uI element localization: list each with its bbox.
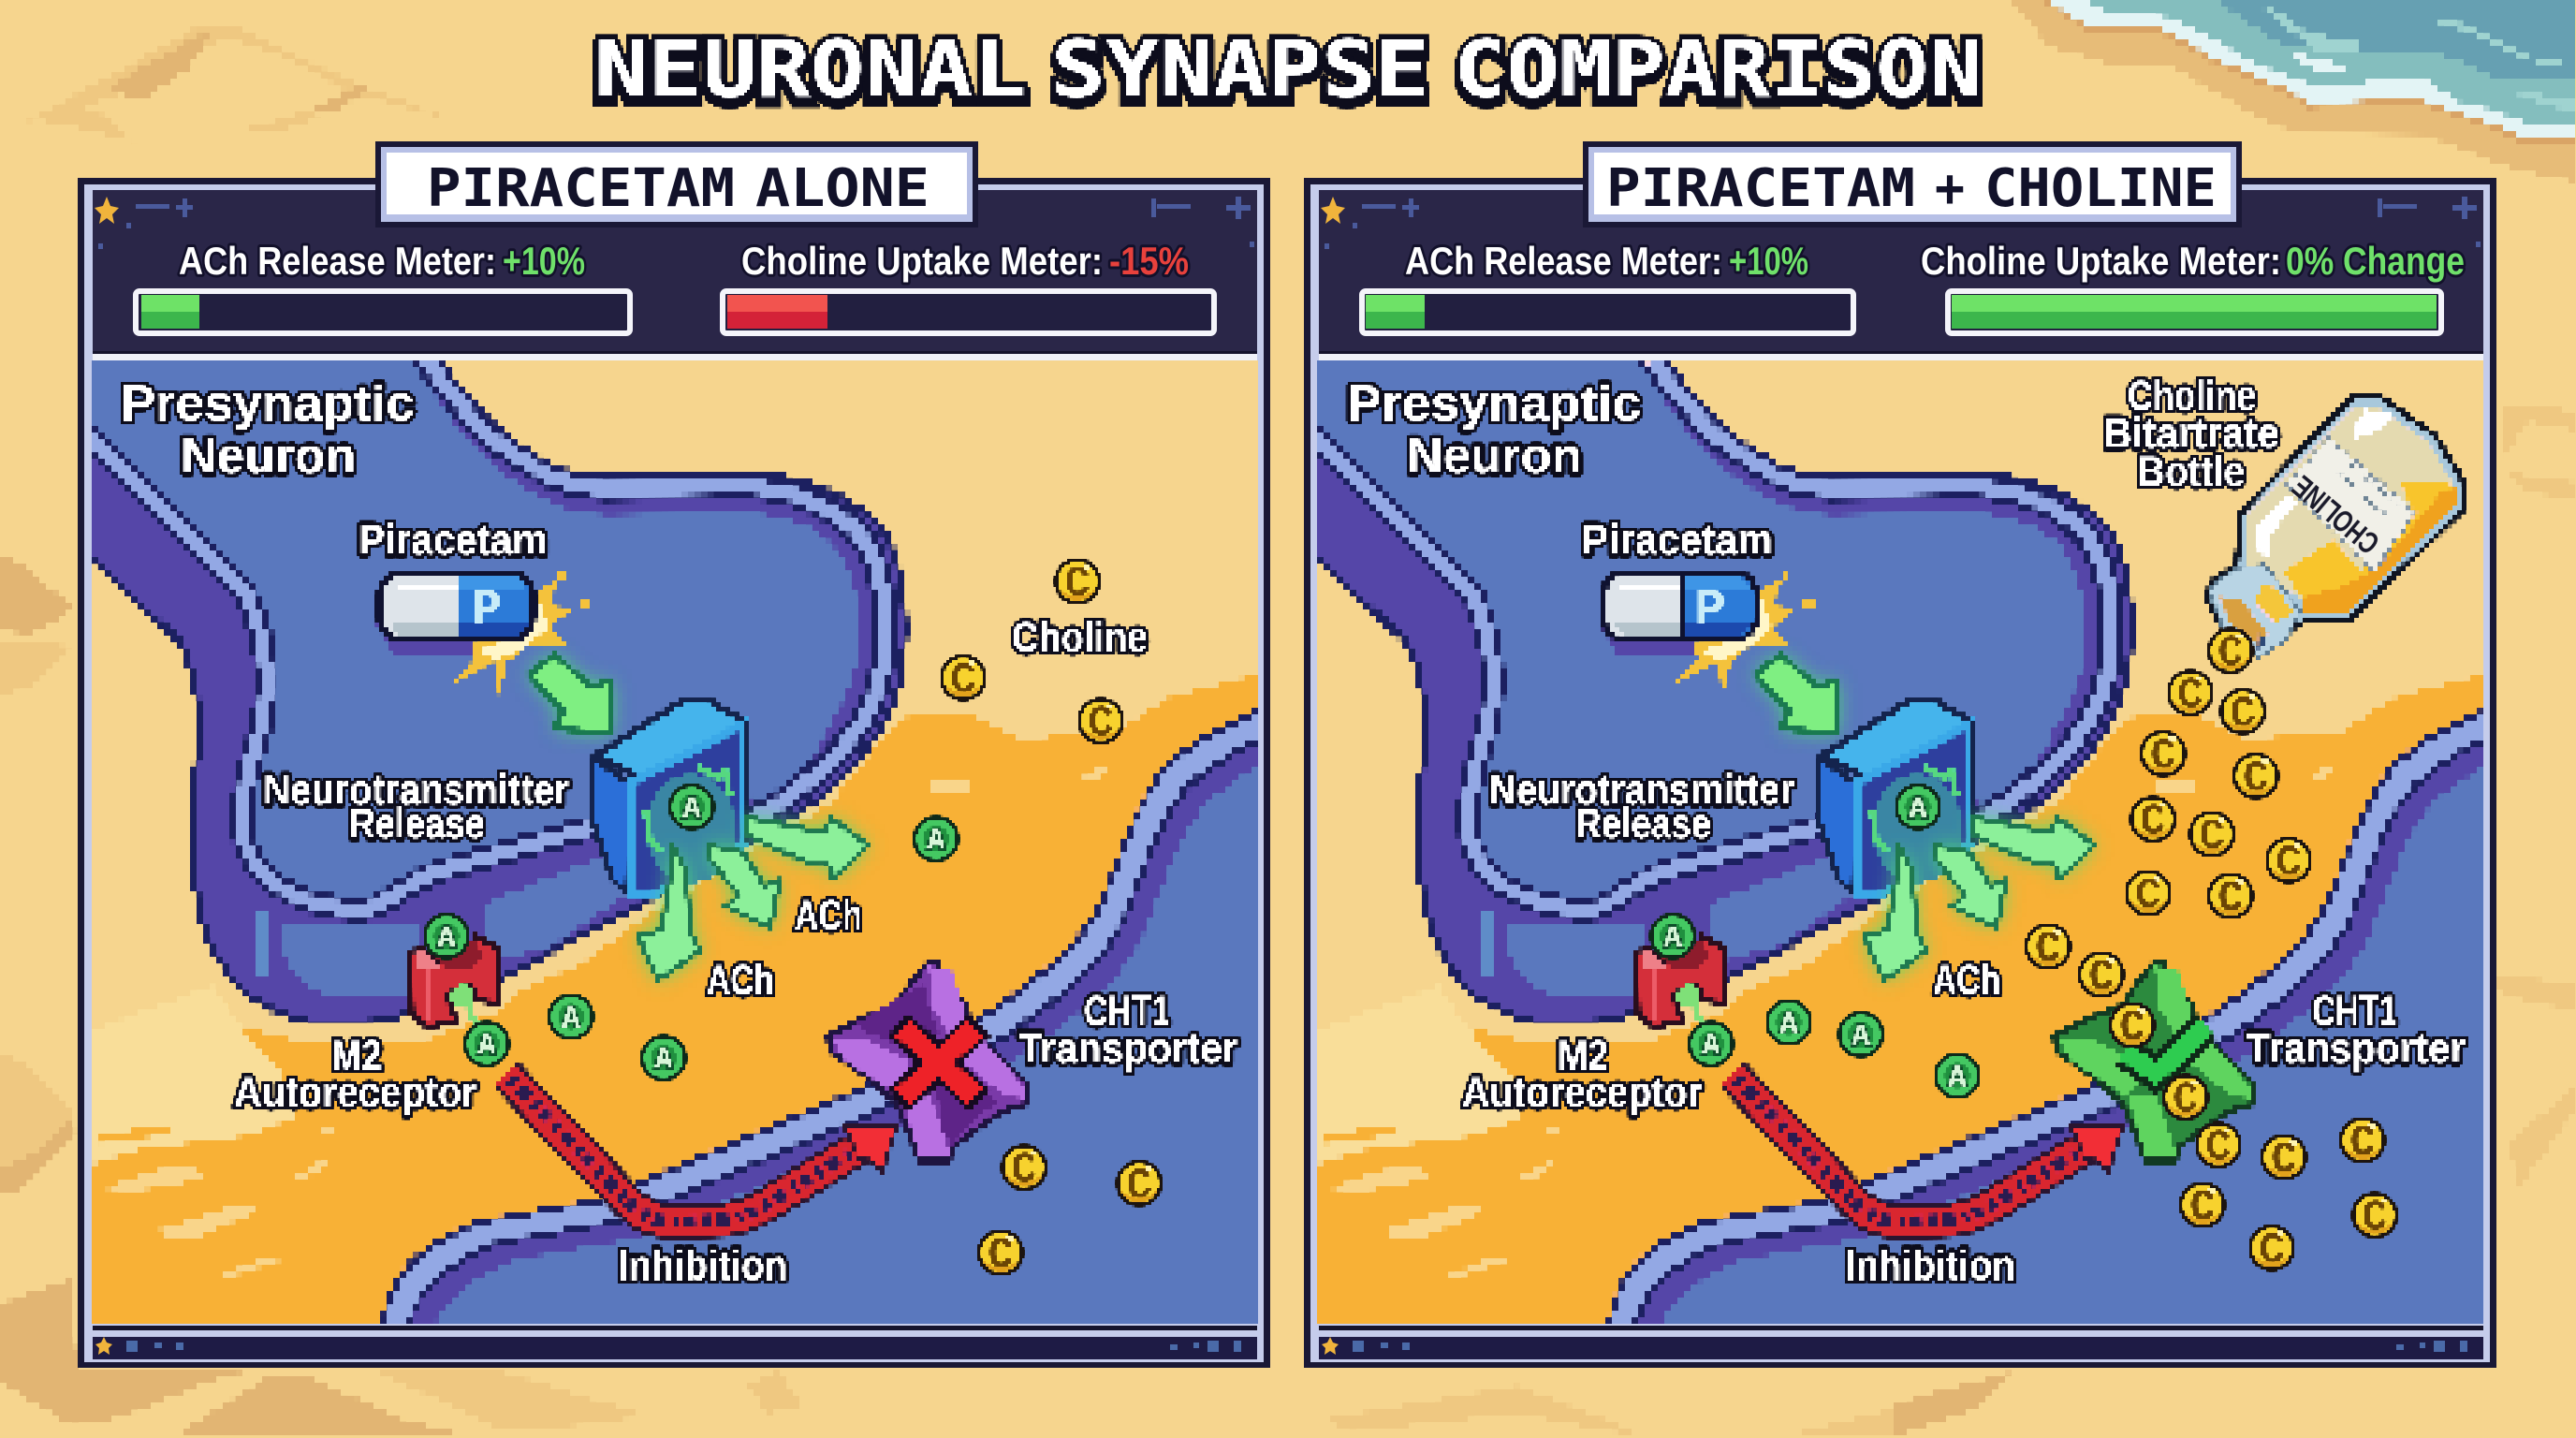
choline molecules: C bbox=[2276, 839, 2302, 888]
ACh molecules: A bbox=[1702, 1029, 1720, 1064]
labels: Choline bbox=[2128, 372, 2256, 419]
choline molecules bbox=[2025, 627, 2398, 1275]
ACh molecules: A bbox=[1779, 1007, 1798, 1042]
choline molecules: C bbox=[2349, 1119, 2376, 1167]
ACh molecules: A bbox=[1852, 1020, 1870, 1054]
choline molecules: C bbox=[2088, 953, 2115, 1002]
labels: Release bbox=[1575, 800, 1711, 847]
meter: ACh release: ACh Release Meter: bbox=[1405, 239, 1722, 283]
CHOLINE bottle text: CHOLINE bbox=[2286, 469, 2386, 561]
inhibition arrow bbox=[1733, 1075, 2123, 1222]
labels: Release bbox=[349, 800, 485, 847]
labels: Choline bbox=[1012, 613, 1148, 661]
choline molecules: C bbox=[1126, 1162, 1152, 1211]
labels: CHT1 bbox=[1084, 987, 1170, 1034]
choline molecules: C bbox=[2140, 798, 2166, 846]
choline molecules: C bbox=[2271, 1136, 2297, 1184]
choline molecules: C bbox=[2217, 629, 2244, 678]
choline molecules: C bbox=[2189, 1183, 2216, 1232]
arrow: piracetam to release site bbox=[1755, 655, 1837, 733]
choline molecules: C bbox=[2230, 690, 2256, 739]
P letter on capsule: P bbox=[471, 580, 503, 640]
postsynaptic neuron bbox=[1601, 707, 2576, 1438]
meter: choline uptake: Choline Uptake Meter: bbox=[741, 239, 1103, 283]
ACh molecules: A bbox=[927, 824, 945, 858]
P letter on capsule: P bbox=[1694, 580, 1726, 640]
tab: piracetam + choline bbox=[1583, 141, 2242, 227]
title: COMPARISON bbox=[1454, 23, 1982, 115]
synaptic cleft fluid bbox=[1310, 672, 2490, 1334]
choline molecules: C bbox=[2199, 813, 2225, 861]
panel: piracetam alone bbox=[78, 141, 1445, 1438]
meter: ACh release: ACh Release Meter: bbox=[179, 239, 496, 283]
labels: M2 bbox=[1558, 1032, 1608, 1079]
labels: Piracetam bbox=[359, 516, 548, 564]
CHT1 transporter blocked bbox=[828, 962, 1027, 1161]
choline molecules: C bbox=[2135, 872, 2161, 920]
arrows: ACh release bbox=[1865, 817, 2094, 980]
choline molecules: C bbox=[2035, 925, 2061, 974]
panel frame bbox=[1304, 178, 2496, 1368]
M2 autoreceptor bbox=[1636, 936, 1724, 1030]
labels: ACh bbox=[795, 891, 862, 939]
choline molecules: C bbox=[2177, 671, 2203, 720]
labels: Presynaptic bbox=[1347, 375, 1641, 432]
labels: Neurotransmitter bbox=[1489, 766, 1794, 814]
starburst bbox=[452, 573, 592, 696]
arrows: ACh release bbox=[638, 817, 868, 980]
choline molecules bbox=[940, 558, 1163, 1280]
meter: ACh release bbox=[1362, 239, 1853, 333]
panel: piracetam + choline bbox=[1304, 141, 2576, 1438]
release vesicle box bbox=[1820, 700, 1977, 896]
choline molecules: C bbox=[2205, 1123, 2232, 1172]
synapse objects bbox=[376, 569, 1027, 1222]
CHT1 transporter active bbox=[2055, 962, 2253, 1161]
meter: choline uptake: 0% Change bbox=[2286, 239, 2465, 283]
meter: choline uptake bbox=[723, 239, 1214, 333]
choline bitartrate bottle bbox=[2203, 393, 2468, 657]
labels bbox=[1347, 372, 2466, 1289]
ACh molecules bbox=[1649, 784, 1981, 1099]
tab: piracetam alone bbox=[375, 141, 978, 227]
tab: piracetam + choline: PIRACETAM bbox=[1606, 158, 1915, 219]
ACh molecules: A bbox=[562, 1002, 580, 1036]
tab: piracetam + choline: + bbox=[1935, 158, 1965, 219]
choline molecules: C bbox=[2243, 755, 2269, 803]
meter: choline uptake: Choline Uptake Meter: bbox=[1921, 239, 2281, 283]
labels: CHT1 bbox=[2312, 987, 2397, 1034]
ACh molecules bbox=[423, 784, 959, 1081]
panel frame bbox=[78, 178, 1270, 1368]
labels: Inhibition bbox=[618, 1241, 787, 1289]
choline molecules: C bbox=[1011, 1146, 1037, 1195]
choline molecules: C bbox=[988, 1231, 1014, 1280]
labels: Autoreceptor bbox=[234, 1068, 476, 1116]
synapse background: fluid and neurons bbox=[92, 360, 1258, 1324]
postsynaptic neuron bbox=[380, 708, 1258, 1324]
choline molecules: C bbox=[2362, 1194, 2388, 1242]
release vesicle box bbox=[593, 700, 751, 896]
title: NEURONAL bbox=[594, 23, 1027, 115]
ACh molecules: A bbox=[1909, 792, 1927, 827]
synaptic cleft fluid bbox=[84, 672, 1264, 1334]
choline molecules: C bbox=[2150, 732, 2176, 781]
tab: piracetam + choline: CHOLINE bbox=[1984, 158, 2217, 219]
labels: Neuron bbox=[1407, 428, 1582, 484]
labels: Neurotransmitter bbox=[263, 766, 569, 814]
synapse objects bbox=[1600, 393, 2468, 1222]
tab: piracetam alone: ALONE bbox=[755, 158, 929, 219]
choline molecules: C bbox=[1064, 560, 1090, 609]
labels: Bottle bbox=[2138, 448, 2245, 495]
labels: Autoreceptor bbox=[1462, 1068, 1703, 1116]
labels: Inhibition bbox=[1845, 1241, 2015, 1289]
meter: choline uptake: -15% bbox=[1109, 239, 1189, 283]
title bbox=[594, 23, 1982, 121]
choline molecules: C bbox=[2259, 1226, 2285, 1275]
labels: Transporter bbox=[2247, 1024, 2466, 1072]
M2 autoreceptor bbox=[410, 936, 498, 1030]
choline molecules: C bbox=[2119, 1004, 2145, 1052]
arrow: piracetam to release site bbox=[529, 655, 610, 733]
meter: ACh release bbox=[136, 239, 630, 333]
labels: Presynaptic bbox=[121, 375, 415, 432]
labels: Transporter bbox=[1018, 1024, 1237, 1072]
piracetam capsule bbox=[1600, 569, 1760, 653]
ACh molecules: A bbox=[1663, 921, 1682, 956]
meter: ACh release: +10% bbox=[1729, 239, 1808, 283]
inhibition arrow bbox=[506, 1075, 897, 1222]
ACh molecules: A bbox=[477, 1029, 496, 1064]
labels: ACh bbox=[707, 956, 774, 1004]
ACh molecules: A bbox=[437, 921, 456, 956]
choline molecules: C bbox=[2217, 874, 2244, 923]
starburst bbox=[1676, 573, 1815, 696]
choline molecules: C bbox=[1088, 699, 1114, 748]
ACh molecules: A bbox=[682, 792, 701, 827]
title: SYNAPSE bbox=[1051, 23, 1429, 115]
ACh molecules: A bbox=[654, 1043, 673, 1078]
presynaptic neuron bbox=[1310, 360, 2131, 1022]
title: SYNAPSE bbox=[1051, 29, 1429, 121]
ACh molecules: A bbox=[1948, 1061, 1967, 1095]
choline molecules: C bbox=[950, 656, 976, 705]
labels: Neuron bbox=[181, 428, 356, 484]
synapse background: fluid and neurons bbox=[1310, 360, 2576, 1438]
meter: ACh release: +10% bbox=[503, 239, 585, 283]
labels: ACh bbox=[1933, 956, 2000, 1004]
presynaptic neuron bbox=[84, 360, 905, 1022]
piracetam capsule bbox=[376, 569, 536, 653]
meter: choline uptake bbox=[1921, 239, 2465, 333]
labels bbox=[121, 375, 1237, 1289]
labels: Piracetam bbox=[1582, 516, 1773, 564]
labels: M2 bbox=[331, 1032, 382, 1079]
labels: Bitartrate bbox=[2103, 409, 2279, 457]
choline molecules: C bbox=[2173, 1076, 2199, 1124]
title: NEURONAL bbox=[594, 29, 1027, 121]
tab: piracetam alone: PIRACETAM bbox=[427, 158, 735, 219]
title: COMPARISON bbox=[1454, 29, 1982, 121]
